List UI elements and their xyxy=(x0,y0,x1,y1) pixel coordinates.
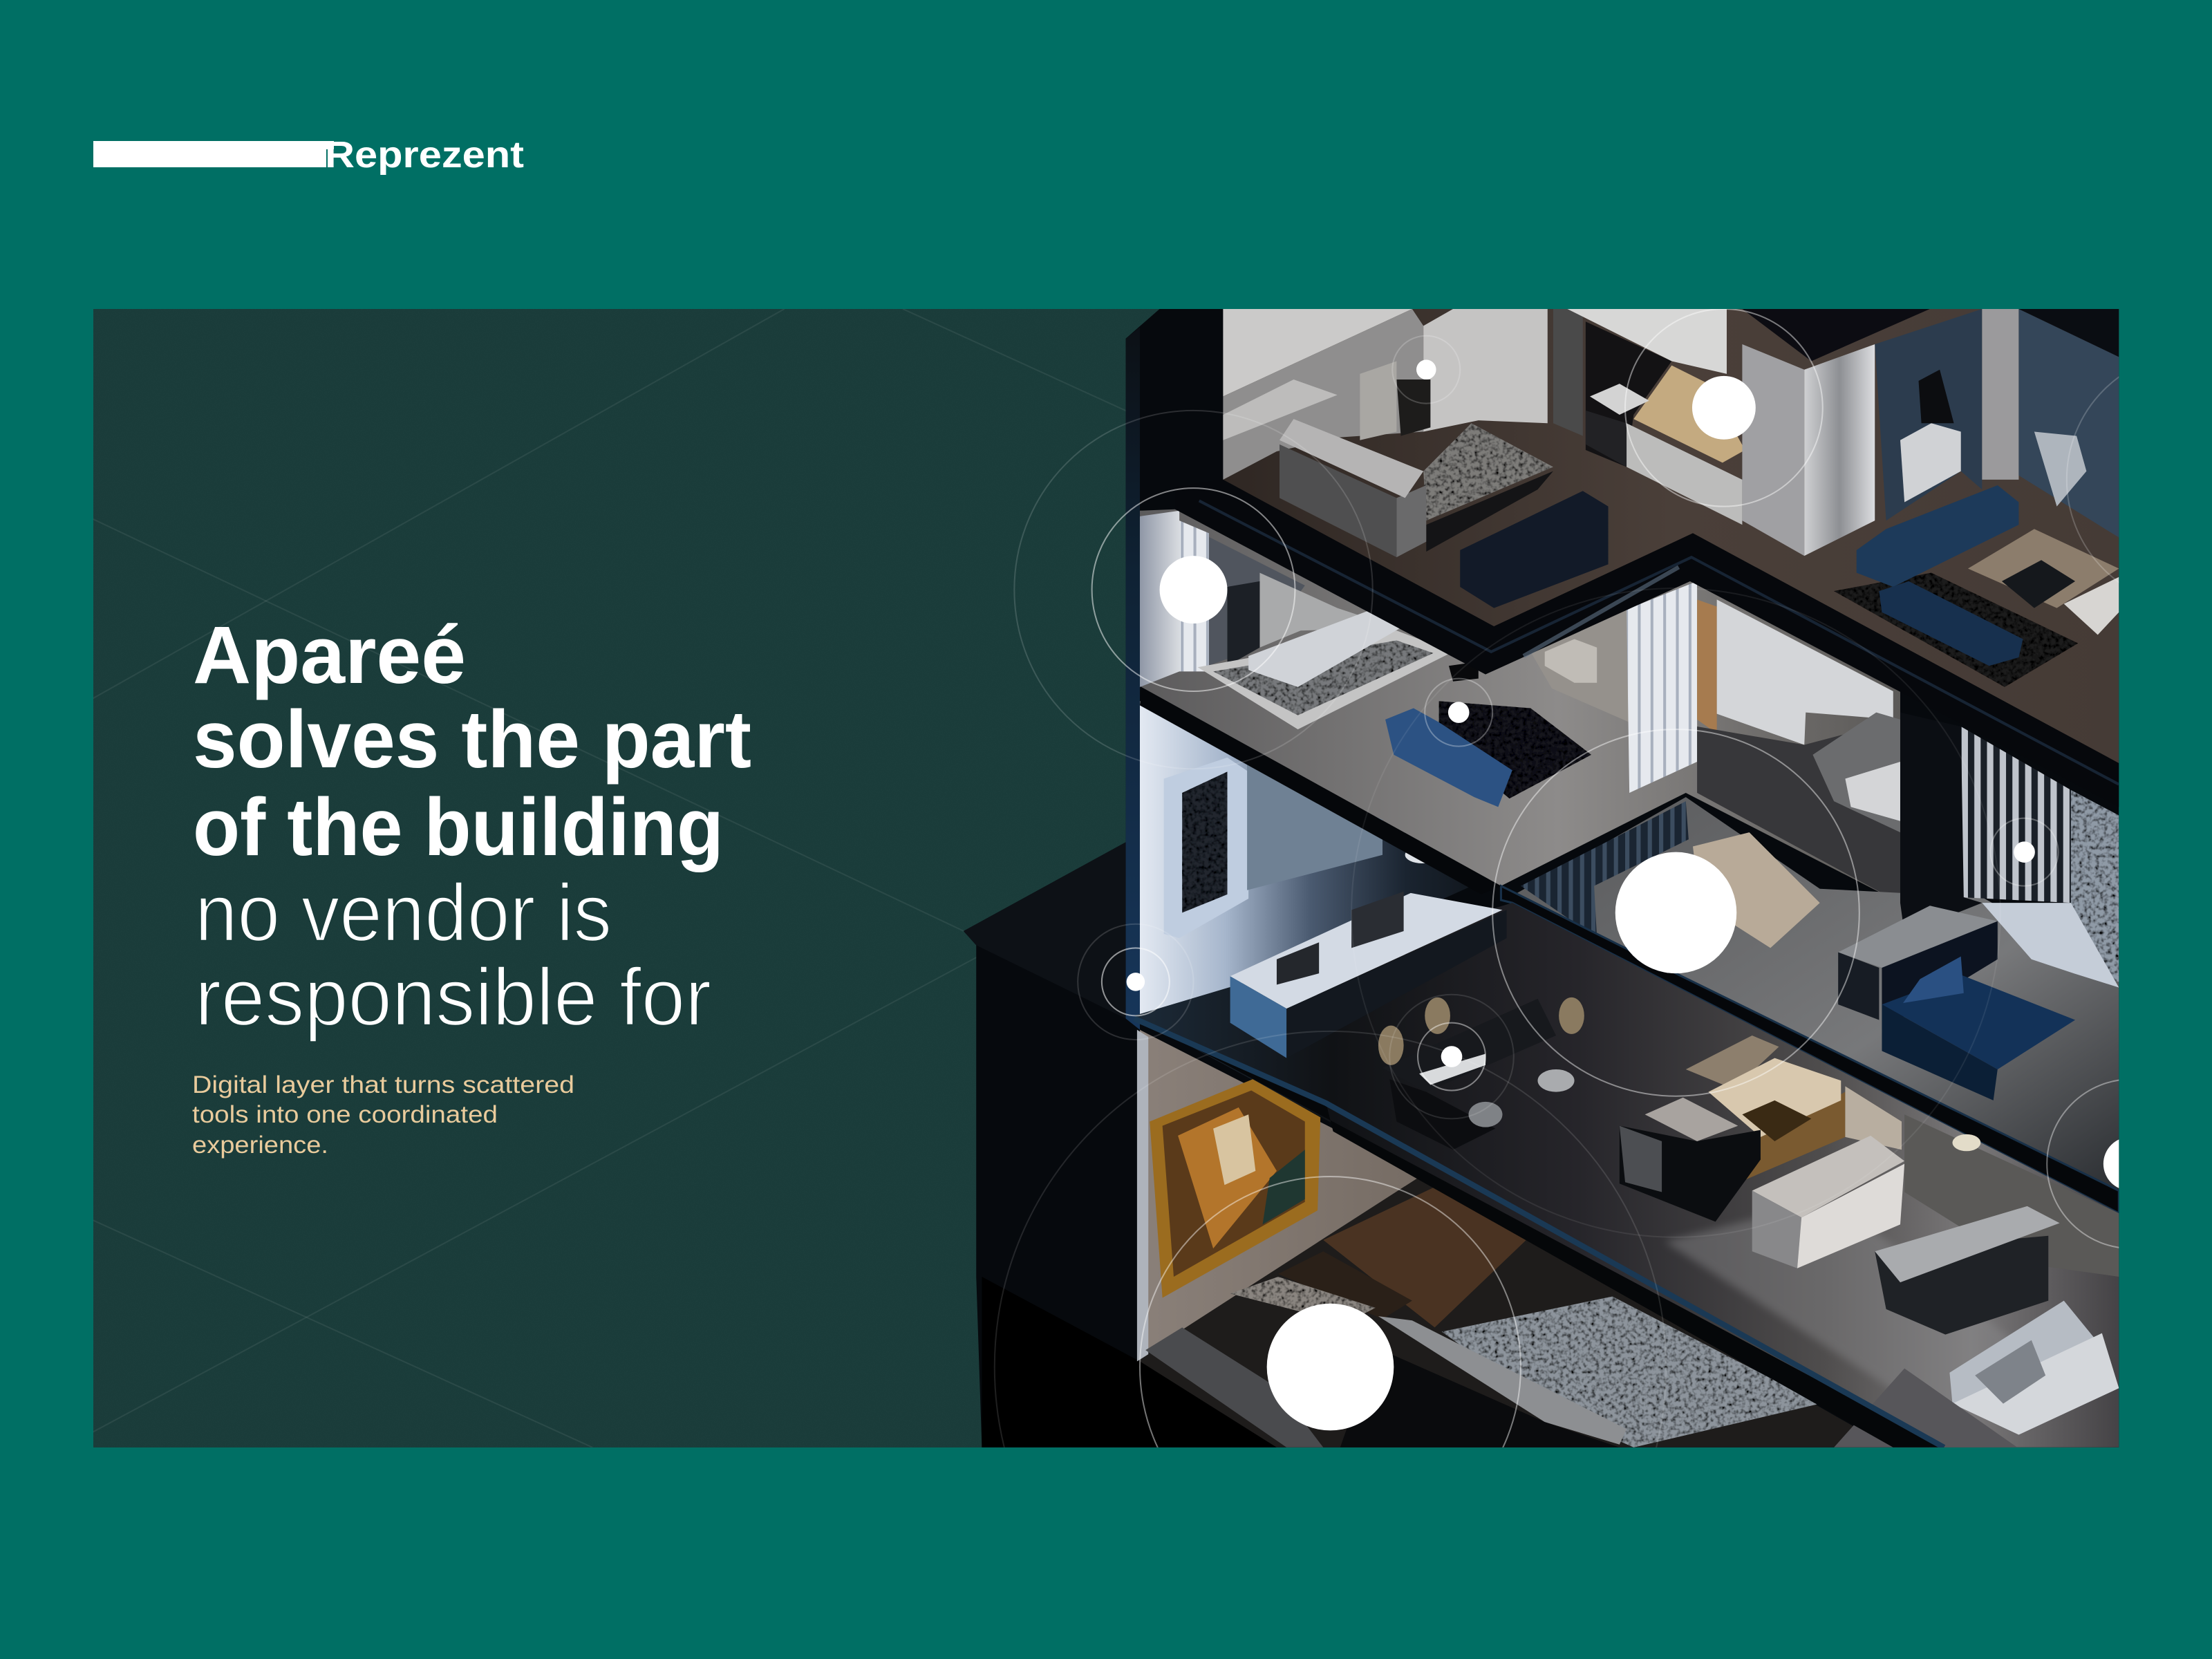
sensor dots xyxy=(1127,359,2157,1430)
subheading: experience. xyxy=(192,1132,328,1159)
headline: solves the part xyxy=(193,694,751,785)
dining table xyxy=(1378,997,1584,1150)
second floor left apartment xyxy=(1140,509,1900,903)
dining and kitchen floor xyxy=(1134,892,2119,1447)
headline: of the building xyxy=(193,782,724,873)
subheading: tools into one coordinated xyxy=(192,1101,498,1128)
painting xyxy=(1150,1079,1320,1298)
central kitchen xyxy=(1620,1035,1904,1268)
sensor ring overlays xyxy=(995,309,2212,1659)
right bedroom xyxy=(1512,713,2119,1197)
building shell xyxy=(964,309,2119,1447)
white desk xyxy=(1230,892,1507,1058)
left kitchen xyxy=(1223,309,1609,608)
main panel xyxy=(93,309,2119,1447)
slab above ground floor xyxy=(1134,1015,1944,1447)
floor slab between top and second floors xyxy=(1175,480,2119,807)
headline: Apareé xyxy=(193,610,466,701)
headline: no vendor is xyxy=(195,868,612,959)
right kitchenette xyxy=(1553,309,1930,556)
top floor apartment xyxy=(1223,309,2119,763)
brand logo: Reprezent xyxy=(325,134,524,176)
ground floor room with painting xyxy=(1137,1030,2017,1447)
headline xyxy=(193,610,751,1043)
slab under right bedroom xyxy=(1140,687,2119,1213)
brand logo xyxy=(93,134,524,176)
right dining and sofa xyxy=(1875,1114,2119,1435)
headline: responsible for xyxy=(195,952,711,1043)
lower left living room xyxy=(1140,701,1481,1018)
curtained living room xyxy=(1834,309,2119,687)
subheading: Digital layer that turns scattered xyxy=(192,1071,574,1098)
building cross-section illustration xyxy=(964,309,2119,1447)
subheading xyxy=(192,1071,574,1159)
